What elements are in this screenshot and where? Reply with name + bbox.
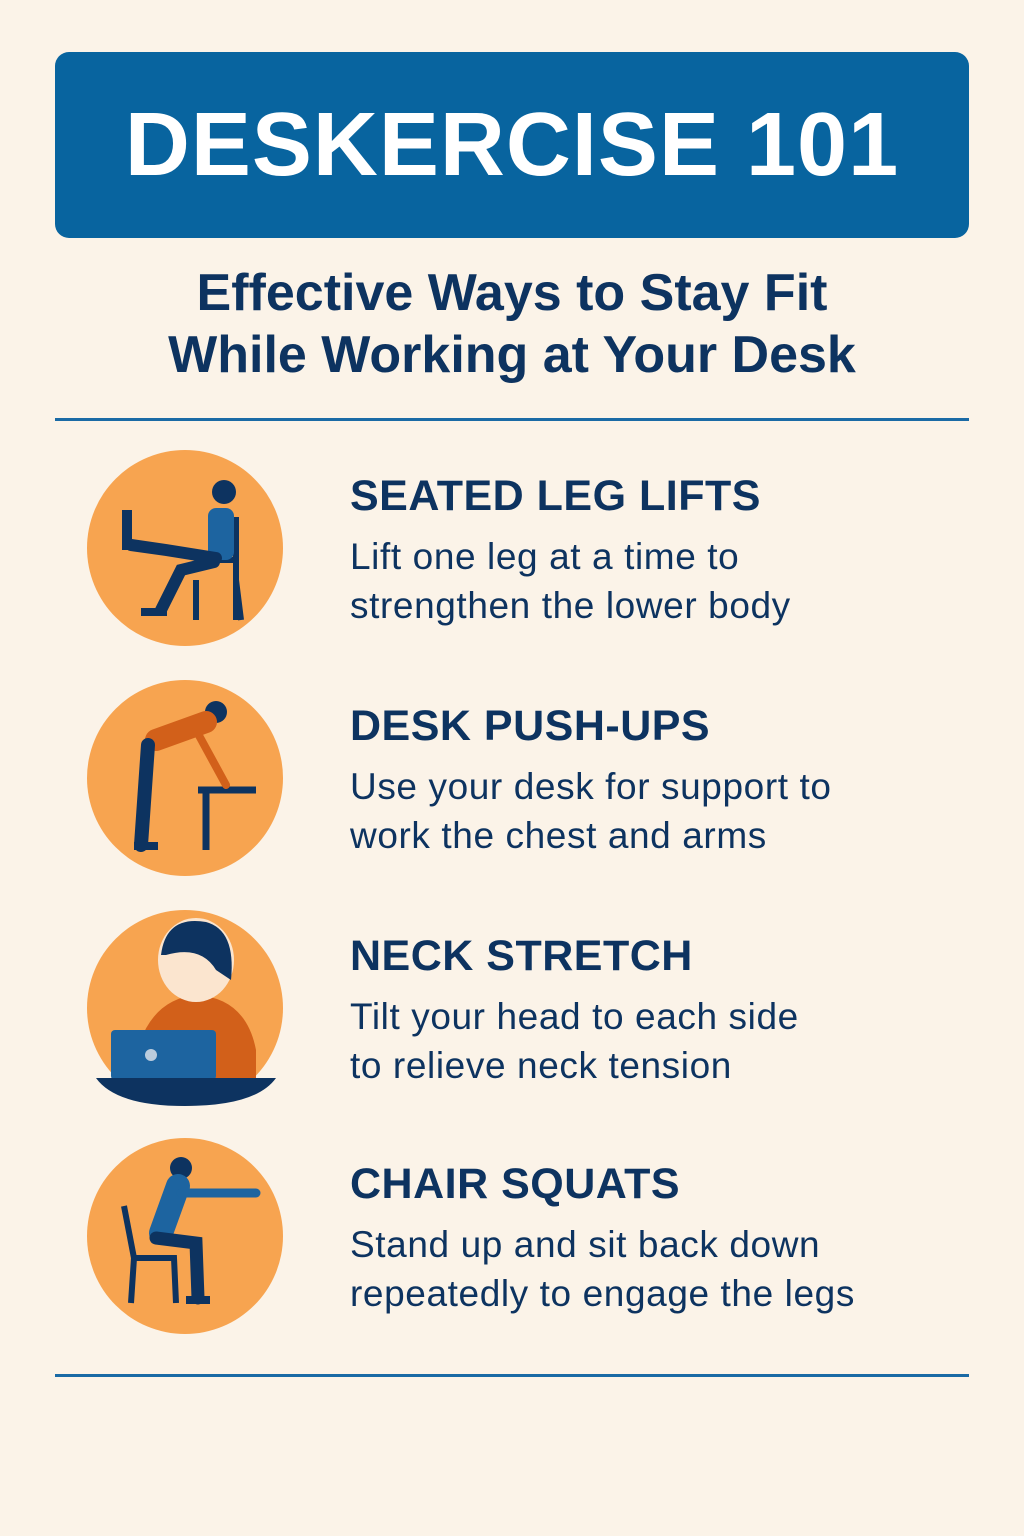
item: seated leg lifts: [87, 450, 791, 646]
item: desk push-ups: [87, 680, 832, 876]
description: [350, 996, 799, 1086]
subtitle: Effective Ways to Stay Fit: [197, 264, 827, 322]
description: Lift one leg at a time to: [350, 536, 739, 577]
description: work the chest and arms: [350, 815, 767, 856]
description: [350, 536, 791, 626]
description: to relieve neck tension: [350, 1045, 732, 1086]
description: strengthen the lower body: [350, 585, 791, 626]
icon: desk push-up: [87, 680, 283, 876]
subtitle: [168, 264, 856, 384]
icon: neck stretch: [87, 910, 283, 1106]
description: [350, 766, 832, 856]
heading: DESK PUSH-UPS: [350, 702, 710, 750]
item: neck stretch: [87, 910, 799, 1106]
heading: SEATED LEG LIFTS: [350, 472, 761, 520]
item: chair squats: [87, 1138, 855, 1334]
subtitle: While Working at Your Desk: [168, 326, 856, 384]
heading: CHAIR SQUATS: [350, 1160, 680, 1208]
description: Use your desk for support to: [350, 766, 832, 807]
description: Stand up and sit back down: [350, 1224, 820, 1265]
icon: seated leg lift: [87, 450, 283, 646]
description: [350, 1224, 855, 1314]
description: Tilt your head to each side: [350, 996, 799, 1037]
title banner: DESKERCISE 101: [125, 95, 899, 195]
icon: chair squat: [87, 1138, 283, 1334]
description: repeatedly to engage the legs: [350, 1273, 855, 1314]
title banner: [55, 52, 969, 238]
heading: NECK STRETCH: [350, 932, 693, 980]
